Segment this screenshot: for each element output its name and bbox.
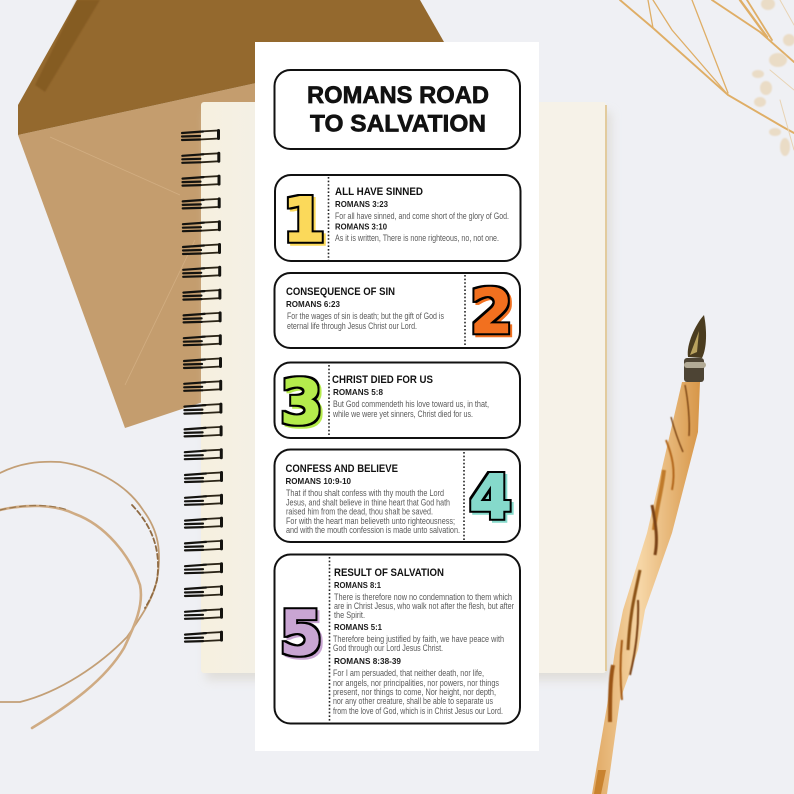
panel 1: all have sinned: ALL HAVE SINNED (335, 186, 423, 198)
notebook (201, 102, 611, 680)
dried branch (620, 0, 794, 156)
panel 1: all have sinned: ROMANS 3:10 (335, 222, 387, 232)
panel 4: confess and believe: That if thou shalt confess with thy mouth the Lord (286, 488, 444, 498)
panel 2: consequence of sin: ROMANS 6:23 (286, 299, 340, 309)
panel 5: result of salvation: from the love of God, which is in Christ Jesus our Lord. (333, 706, 503, 716)
panel 5: result of salvation: nor angels, nor principalities, nor powers, nor things (333, 678, 499, 688)
title panel: TO SALVATION (310, 110, 486, 138)
panel 3: christ died for us: ROMANS 5:8 (333, 387, 383, 397)
twine (0, 462, 159, 728)
panel 5: result of salvation: are in Christ Jesus, who walk not after the flesh, but after (334, 601, 514, 611)
panel 3: christ died for us: while we were yet sinners, Christ died for us. (332, 409, 473, 419)
fountain pen (592, 315, 706, 794)
bookmark card (255, 42, 539, 751)
panel 5: result of salvation: Therefore being justified by faith, we have peace with (333, 634, 504, 644)
panel 4: confess and believe: Jesus, and shalt believe in thine heart that God hath (286, 498, 450, 508)
spiral binding (182, 130, 222, 642)
panel 2: consequence of sin (274, 273, 520, 348)
panel 5: result of salvation: ROMANS 8:38-39 (334, 656, 401, 666)
panel 2: consequence of sin: For the wages of sin is death; but the gift of God is (287, 311, 444, 321)
panel 4: confess and believe: For with the heart man believeth unto righteousness; (286, 516, 455, 526)
panel 4: confess and believe (274, 450, 520, 542)
panel 4: confess and believe: and with the mouth confession is made unto salvation. (286, 525, 460, 535)
panel 5: result of salvation: present, nor things to come, Nor height, nor depth, (333, 687, 496, 697)
panel 5: result of salvation: For I am persuaded, that neither death, nor life, (333, 668, 484, 678)
panel 1: all have sinned (275, 175, 520, 261)
panel 1: all have sinned: As it is written, There is none righteous, no, not one. (335, 233, 499, 243)
number 1: 1 (283, 185, 325, 256)
panel 5: result of salvation: There is therefore now no condemnation to them which (334, 592, 512, 602)
envelope (18, 0, 444, 428)
panel 4: confess and believe: raised him from the dead, thou shalt be saved. (286, 506, 433, 516)
panel 5: result of salvation: ROMANS 5:1 (334, 622, 382, 632)
panel 5: result of salvation (274, 554, 520, 724)
panel 4: confess and believe: CONFESS AND BELIEVE (286, 463, 398, 475)
panel 2: consequence of sin: CONSEQUENCE OF SIN (286, 286, 395, 298)
number 3: 3 (280, 367, 323, 438)
panel 1: all have sinned: ROMANS 3:23 (335, 199, 388, 209)
panel 5: result of salvation: the Spirit. (334, 610, 365, 620)
panel 1: all have sinned: For all have sinned, and come short of the glory of God. (335, 211, 509, 221)
number 5: 5 (280, 598, 322, 669)
panel 3: christ died for us: CHRIST DIED FOR US (332, 374, 433, 386)
title panel: ROMANS ROAD (307, 82, 489, 109)
panel 2: consequence of sin: eternal life through Jesus Christ our Lord. (287, 321, 417, 331)
panel 5: result of salvation: God through our Lord Jesus Christ. (333, 643, 443, 653)
panel 4: confess and believe: ROMANS 10:9-10 (286, 476, 351, 486)
panel 5: result of salvation: nor any other creature, shall be able to separate us (333, 696, 493, 706)
title panel (274, 70, 520, 149)
panel 5: result of salvation: RESULT OF SALVATION (334, 567, 444, 579)
number 2: 2 (470, 276, 513, 348)
panel 5: result of salvation: ROMANS 8:1 (334, 580, 381, 590)
panel 3: christ died for us: But God commendeth his love toward us, in that, (333, 399, 489, 409)
panel 3: christ died for us (274, 362, 520, 438)
number 4: 4 (469, 462, 512, 533)
